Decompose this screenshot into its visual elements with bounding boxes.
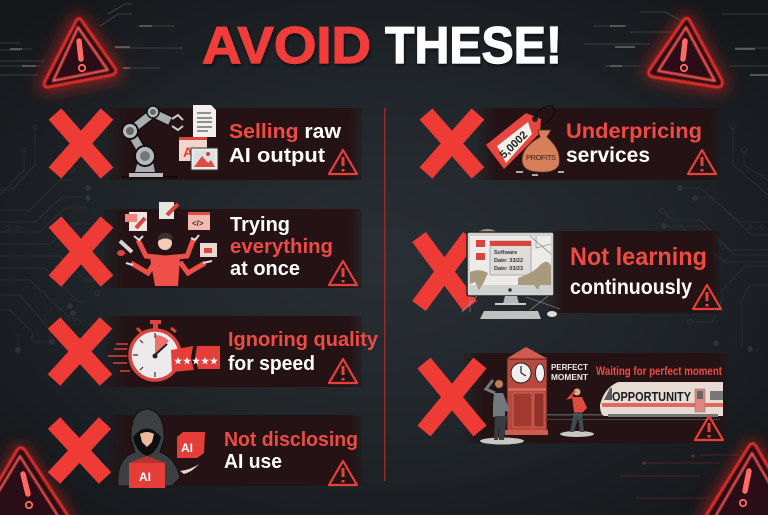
icon: stopwatch and torn rating card: ★★★★★: [174, 356, 219, 366]
icon: hooded figure with AI boxes: AI: [181, 441, 193, 455]
panel: trying everything at once: [55, 202, 362, 288]
icon: glowing warning triangle bottom left: [0, 448, 72, 515]
icon: dusty computer: Date: 33/22: [494, 258, 523, 264]
body text: continuously: [570, 276, 692, 299]
icon: red X: [424, 363, 480, 431]
icon: warning triangle: [329, 261, 357, 285]
data streaks: top right: [584, 12, 768, 75]
body text: for speed: [228, 353, 315, 375]
icon: dusty computer: [462, 229, 560, 319]
caption text: [551, 363, 588, 382]
icon: price tag and money bag: [486, 106, 564, 175]
icon: person juggling tasks: </>: [192, 219, 204, 228]
icon: opportunity train: [600, 382, 723, 417]
icon: robot arm and documents: A: [183, 144, 193, 160]
icon: warning triangle: [329, 461, 357, 485]
icon: glowing warning triangle top left: [44, 18, 116, 87]
icon: warning triangle: [688, 150, 716, 174]
icon: person juggling tasks: [117, 202, 217, 286]
body text: at once: [230, 258, 300, 280]
icon: stopwatch and torn rating card: [108, 320, 220, 380]
heading text: Selling raw: [229, 121, 341, 143]
icon: warning triangle: [695, 416, 723, 440]
banner: [104, 209, 362, 288]
caption text: MOMENT: [551, 373, 588, 382]
icon: clock tower and waiting people: [480, 347, 720, 444]
heading text: Waiting for perfect moment: [596, 364, 722, 378]
divider: [384, 108, 386, 481]
heading text: Not disclosing: [224, 429, 358, 451]
title: AVOID: [202, 17, 371, 75]
panel: not disclosing AI use: [54, 409, 362, 488]
highlighted text: everything: [230, 236, 333, 258]
icon: price tag and money bag: 5,0002: [498, 129, 530, 161]
heading text: Trying: [230, 214, 290, 236]
icon: dusty computer: Software: [494, 250, 517, 256]
icon: warning triangle: [329, 359, 357, 383]
icon: opportunity train: OPPORTUNITY: [612, 390, 692, 404]
banner: [464, 353, 728, 443]
body text: AI output: [229, 145, 325, 167]
title: [202, 17, 562, 75]
icon: robot arm and documents: [122, 105, 218, 178]
icon: hooded figure with AI boxes: [118, 409, 205, 488]
icon: red X: [55, 114, 107, 173]
banner: [550, 231, 720, 313]
panel: selling raw AI output: [55, 105, 362, 180]
icon: glowing warning triangle bottom right: [702, 444, 768, 515]
banner: [106, 316, 362, 387]
icon: hooded figure with AI boxes: AI: [139, 470, 151, 484]
heading text: Ignoring quality: [228, 329, 379, 351]
data streaks: bottom right: [620, 455, 740, 498]
heading text: Not learning: [570, 243, 707, 271]
circuit pattern: right: [660, 124, 768, 352]
circuit pattern: left: [0, 125, 100, 352]
icon: red X: [54, 423, 105, 478]
icon: red X: [55, 222, 107, 281]
icon: red X: [54, 323, 106, 380]
banner: [478, 108, 720, 180]
banner: [108, 415, 362, 486]
body text: AI use: [224, 451, 282, 473]
icon: dusty computer: Date: 03/23: [494, 266, 523, 272]
data streaks: top left: [0, 4, 183, 75]
caption text: PERFECT: [551, 363, 588, 372]
icon: warning triangle: [329, 150, 357, 174]
icon: warning triangle: [693, 285, 721, 309]
icon: red X: [419, 237, 470, 306]
panel: not learning continuously: [419, 229, 721, 319]
heading text: Underpricing: [566, 120, 702, 143]
icon: glowing warning triangle top right: [649, 18, 722, 87]
icon: red X: [426, 114, 478, 173]
panel: waiting for perfect moment: [424, 347, 728, 444]
body text: services: [566, 144, 650, 167]
title: THESE!: [385, 17, 562, 75]
icon: price tag and money bag: PROFITS: [526, 153, 556, 162]
banner: [108, 108, 362, 180]
panel: underpricing services: [426, 106, 720, 180]
panel: ignoring quality for speed: [54, 316, 379, 387]
